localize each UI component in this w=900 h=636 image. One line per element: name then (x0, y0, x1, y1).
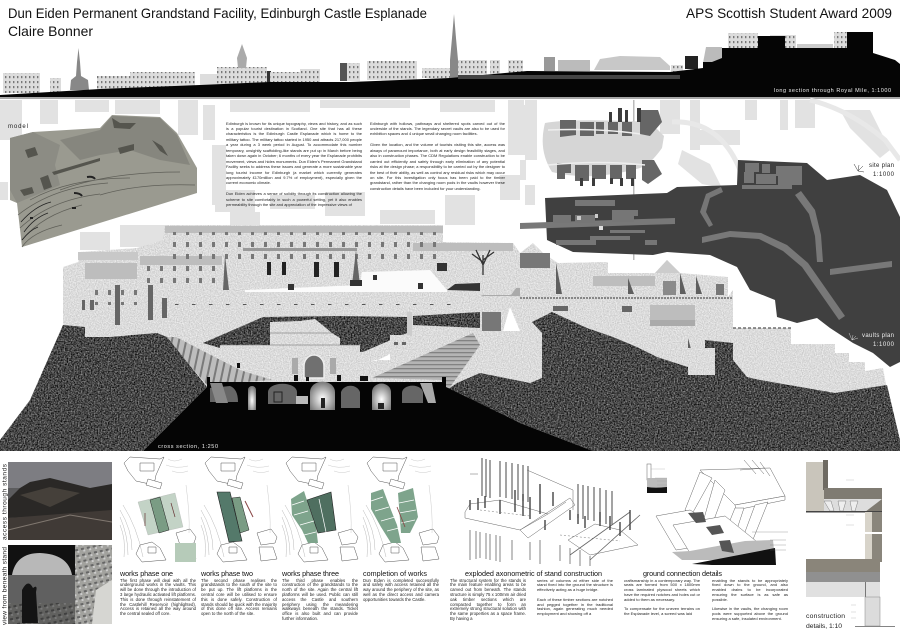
dark rock band behind gatehouse (203, 316, 407, 352)
heading: completion of works: completion of works (363, 569, 427, 578)
text: ground connection column two (712, 578, 788, 621)
main title: Dun Eiden Permanent Grandstand Facility, Edinburgh Castle Esplanade (8, 5, 427, 21)
cross section: castle stone elevation (0, 225, 900, 451)
black ground section (0, 32, 900, 97)
photo: view from beneath stand (8, 545, 112, 624)
phase plan four (363, 457, 439, 562)
intro text column one: Dun Eiden achieves a sense of solidity through its construction allowing the scheme to site comfortably in such a powerful setting, yet it also enables permeability through the site and appreciation of the impressive views of (226, 191, 362, 207)
text: works phase two: The second phase realises the grandstands to the south of the site to be put up. The lift platforms in the central core will be utilised to ensure this is done safely. Construction of stands should be quick with the majority of this done off site. Access remains open to the north of the site. (201, 578, 277, 616)
vault openings (210, 382, 436, 410)
text: ground connection column two: enabling the stands to be appropriately fixed down to the ground, and also enabled drains to be incorporated ensuring the surface is as safe as possible. (712, 578, 788, 602)
heading: exploded axonometric: exploded axonometric of stand construction (465, 569, 602, 578)
text: ground connection column one: craftsmanship in a contemporary way. The seats are formed from 500 x 1800mm cross laminated plywood sheets which have the required notches and holes cut or added to them as necessary. (624, 578, 700, 602)
text: completion of works: Dun Eiden is completed successfully and safely with access retained all the way around the periphery of the site, as well as the direct access and camera opportunities towards the Castle. (363, 578, 439, 602)
castle windows (163, 232, 443, 260)
skyline buildings, right half (450, 14, 847, 78)
construction detail section: details, 1:10 (806, 623, 842, 630)
circulation bar: short curve (795, 191, 823, 262)
text: works phase one: The first phase will deal with all the underground works in the vaults. This will be done through the introduction of 3 large hydraulic activated lift platforms. This is done through reinstatement of the Castlehill Reservoir (highlighted). Access is retained all the way around the central sealed off core. (120, 578, 196, 616)
vault rooms (553, 163, 802, 245)
heading: works phase one: works phase one (119, 569, 173, 578)
model photograph (8, 115, 197, 247)
roofs and upper building strips (78, 226, 724, 320)
text: stand construction column two: Each of these timber sections are notched and pegged together in the traditional fashion, again generating much needed employment and showing off a (537, 597, 613, 616)
left timber grandstand (165, 337, 272, 385)
author name: Claire Bonner (8, 23, 93, 39)
label: model: model (8, 124, 28, 130)
construction detail section (806, 460, 895, 630)
site plan label (854, 163, 895, 178)
intro text column two: Given the location, and the volume of tourists visiting this site, access was always of paramount importance, both at early design feasibility stages, and also in construction phases. The CDM Regulations enable construction to be carried out efficiently and safely through early elimination of any potential risks at the design phase; a responsibility to be carried out by the designer to the best of their ability, as well as control any residual risks which may occur on site. For this investigation only focus has been paid to the timber grandstand, rather than the changing room pods in the vaults however these construction details have been included for your understanding. (370, 142, 505, 191)
circulation bar: central walkway (520, 218, 675, 229)
award title: APS Scottish Student Award 2009 (686, 5, 892, 21)
right timber grandstand (372, 333, 480, 390)
ground connection small detail (647, 464, 667, 493)
text: stand construction column one: The structural system for the stands is the main feature enabling areas to be carved out from beneath. The stands structure is simply 75 x 100mm air dried oak timber sections which are compacted together to form an extremely strong structural solution with the same properties as a space frame. By having a (450, 578, 526, 621)
intro text column one: Edinburgh is known for its unique topography, views and history, and as such is a popular tourist destination in Scotland. One site that has all these characteristics is the Edinburgh Castle Esplanade which is home to the military tattoo. The military tattoo started in 1950 and attracts 217,000 people a year during a 3 week period in August. To accommodate this number temporary, unsightly scaffolding-like stands are put up in March before being taken down again in October; 6 months of every year the Esplanade prohibits movement, views and hides monuments. Dun Eiden's Permanent Grandstand Facility seeks to address these issues and generate a more sustainable year long tourist income for Edinburgh (a market which currently generates approximately £170million and 9.7% of employment), especially given the current economic climate. (226, 121, 362, 185)
label: construction details: construction (806, 613, 845, 620)
intro text column two (370, 121, 505, 191)
circulation bar: straight link (830, 261, 892, 275)
gatehouse and lower wall (270, 319, 340, 347)
heading: works phase three: works phase three (281, 569, 339, 578)
intro text column two: Edinburgh with hollows, pathways and sheltered spots carved out of the underside of the stands. The legendary secret vaults are also to be used for exhibition spaces and 4 unique small changing room facilities. (370, 121, 505, 136)
text: ground connection column two: Likewise in the vaults, the changing room pods were supported above the ground ensuring a safe, insulated environment. (712, 606, 788, 621)
text: works phase three: The third phase enables the construction of the grandstands to the north of the site. Again the central lift platforms will be used. Public can still access the Castle and southern periphery using the meandering walkways beneath the stands. Ticket office is also built and can provide further information. (282, 578, 358, 621)
text: ground connection column one (624, 578, 700, 616)
phase plan two (201, 457, 277, 562)
circulation bar: long curve (702, 231, 845, 320)
lit vault openings in section (458, 75, 680, 79)
vaults plan label (849, 333, 895, 348)
phase plan three (282, 457, 358, 562)
rock masses (0, 325, 207, 451)
phase plan one (120, 457, 196, 562)
oval plan of grandstand (543, 108, 664, 186)
exploded axonometric drawing (465, 458, 640, 566)
vaults plan label: vaults plan (862, 333, 894, 339)
vaults plan dark block (520, 160, 900, 367)
long section caption: long section through Royal Mile, 1:1000 (774, 88, 891, 94)
site plan label: site plan (869, 163, 894, 169)
site plan label: 1:1000 (873, 172, 895, 178)
heading: works phase two: works phase two (200, 569, 253, 578)
skyline buildings, left half (3, 44, 452, 93)
rotated label: view from beneath stand: view from beneath stand (2, 547, 8, 625)
heading: ground connection details: ground connection details (643, 569, 722, 578)
text: stand construction column two (537, 578, 613, 616)
pale site plan background (0, 100, 900, 260)
white stone buttress (688, 348, 715, 375)
ground connection axonometric (656, 460, 788, 565)
rotated label: access through stands: access through stands (2, 463, 8, 540)
photo: access through stands (8, 462, 112, 540)
label: cross section: cross section, 1:250 (158, 444, 218, 450)
long section skyline through Royal Mile (0, 14, 900, 99)
text: ground connection column one: To compensate for the uneven terrains on the Esplanade level, a screed was laid (624, 606, 700, 616)
black vault mass (143, 377, 593, 451)
white courtyard (245, 270, 447, 292)
text: stand construction column two: series of columns at either side of the stand fixed into the ground the structure is effectively acting as a huge bridge. (537, 578, 613, 592)
roof and tree to right (447, 283, 480, 291)
people on esplanade (237, 363, 368, 381)
vaults plan label: 1:1000 (873, 342, 895, 348)
